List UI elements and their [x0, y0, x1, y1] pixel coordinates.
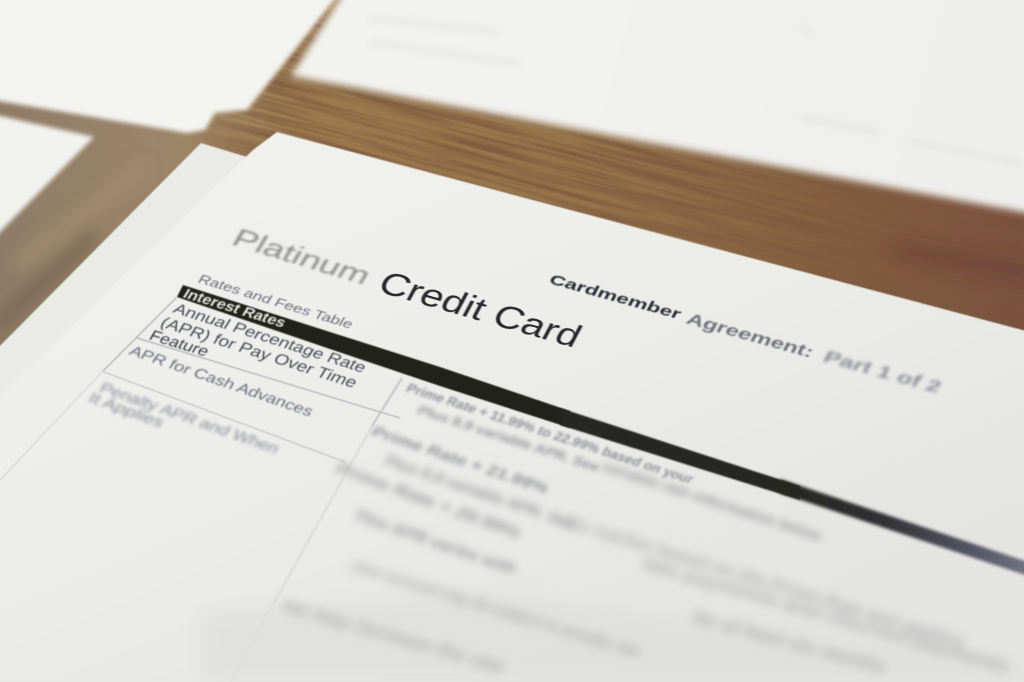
bar label: Interest Rates: Interest Rates — [180, 287, 289, 331]
heading: Cardmember Agreement — [546, 272, 945, 397]
table row: Penalty APR — [85, 380, 282, 457]
table cell text, out of focus: This APR varies with — [350, 507, 520, 578]
table row: Annual Percentage Rate: (APR) for Pay Over Time — [157, 315, 361, 392]
paper: top right sheet — [291, 0, 1024, 218]
table row: Annual Percentage Rate: Annual Percentage Rate — [170, 301, 369, 376]
black header bar — [177, 285, 1024, 578]
table cell text, out of focus: Plus 8.9 variable APR. See — [414, 403, 603, 474]
paper: top left sheet — [0, 0, 358, 133]
paper: underlying sheet — [0, 143, 290, 450]
table cell text, out of focus — [277, 381, 1013, 678]
table cell text, out of focus: Plus 8.9 variable APR. See — [381, 453, 579, 533]
table cell text, out of focus: variable rate information below — [598, 459, 826, 545]
heading: Cardmember Agreement: Part 1 of 2 — [820, 347, 945, 397]
table cell text, out of focus: late payments and returned payments — [637, 554, 1013, 677]
paper: left small sheet — [0, 109, 94, 262]
table row: Annual Percentage Rate — [146, 301, 369, 392]
title: Platinum Credit Card: Credit Card — [372, 266, 587, 355]
table row: APR for Cash Advances: APR for Cash Advances — [126, 344, 316, 420]
table grid lines — [0, 297, 402, 682]
heading: Cardmember Agreement: Agreement: — [683, 310, 817, 361]
table row: Penalty APR: Penalty APR and When — [96, 380, 282, 457]
table cell text, out of focus: Prime Rate + 20.99% — [332, 460, 525, 542]
table cell text, out of focus: Prime Rate + 21.99% — [368, 424, 553, 497]
table row: Penalty APR: It Applies — [85, 390, 168, 431]
table cell text, out of focus: the market based on the Prime Rate and applies — [558, 510, 971, 651]
wood table — [0, 0, 1024, 347]
table cell text, out of focus: we may increase the rate — [277, 595, 510, 678]
table cell text, out of focus: your account may be subject to penalty rate — [348, 555, 646, 661]
heading: Cardmember Agreement: Cardmember — [546, 272, 684, 323]
title: Platinum Credit Card — [227, 223, 587, 355]
title: Platinum Credit Card: Platinum — [227, 223, 376, 290]
table cell text, out of focus: for at least six months — [688, 607, 892, 678]
table row: Annual Percentage Rate: Feature — [146, 328, 212, 360]
table cell text, out of focus: Prime Rate + 11.99% to 22.99% based on your — [403, 381, 697, 486]
table caption: Rates and Fees Table: Rates and Fees Table — [195, 272, 356, 331]
